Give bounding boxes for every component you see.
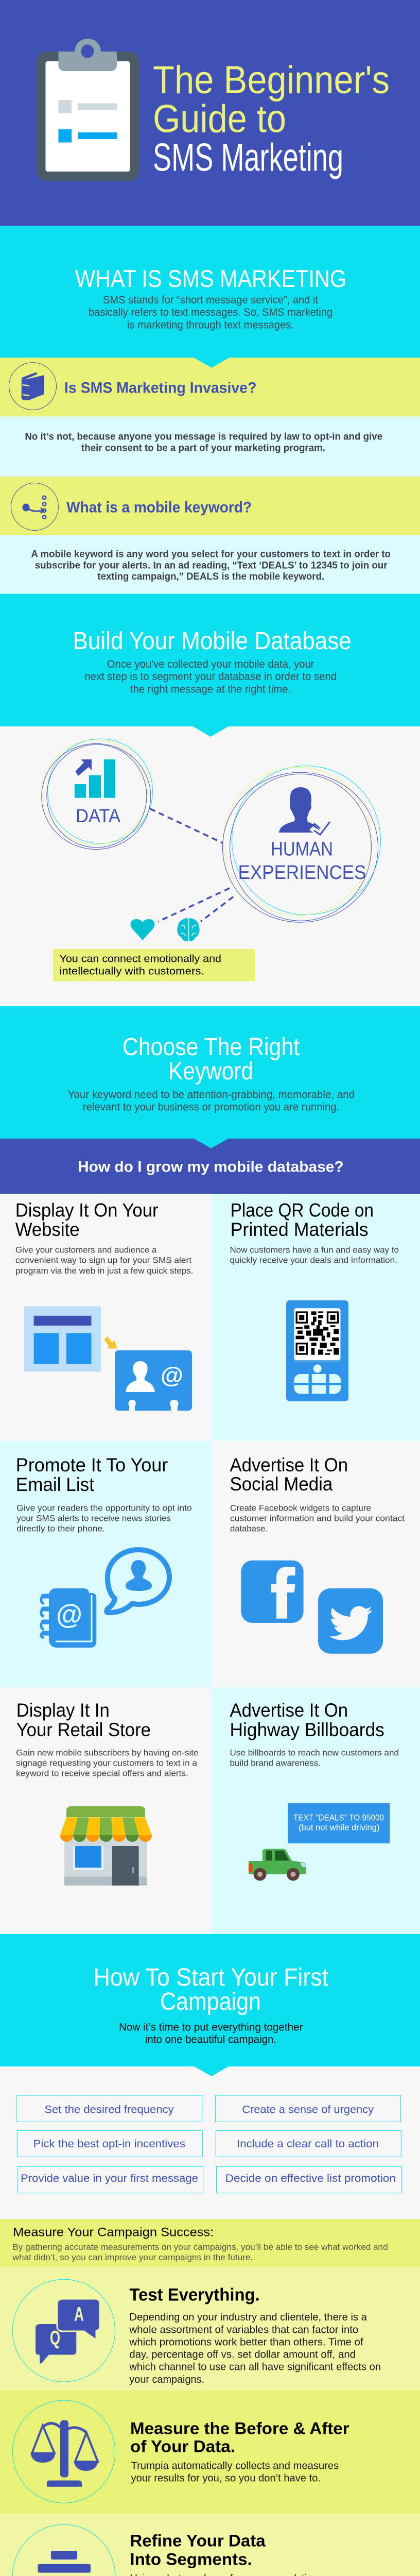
icon: clipboard: [36, 39, 139, 181]
step box: [215, 2095, 400, 2122]
icon: q and a bubbles: [12, 2279, 115, 2382]
heading: Into Segments.: [130, 2550, 252, 2568]
heading: Refine Your Data: [130, 2532, 266, 2550]
heading: Test Everything.: [129, 2285, 260, 2305]
step box: Create a sense of urgency: [242, 2104, 374, 2115]
heading: Campaign: [160, 1988, 261, 2015]
text block: the right message at the right time.: [130, 683, 291, 695]
step box: Decide on effective list promotion: [225, 2173, 396, 2184]
text block: [31, 548, 391, 582]
step box: Pick the best opt-in incentives: [33, 2138, 185, 2150]
text block: [230, 1503, 405, 1533]
text block: database.: [230, 1524, 268, 1533]
text block: Once you've collected your mobile data, your: [107, 658, 314, 670]
heading: Measure Your Campaign Success:: [13, 2225, 214, 2239]
panel: email list: [0, 1440, 211, 1687]
panel: how do i grow: [0, 1139, 420, 1194]
icon: data circle: [42, 739, 153, 850]
icon: storefront: [60, 1806, 152, 1886]
text block: By gathering accurate measurements on your campaigns, you’ll be able to see what worked and: [12, 2242, 388, 2252]
icon: twitter: [318, 1588, 383, 1654]
text block: subscribe for your alerts. In an ad reading, “Text ‘DEALS’ to 12345 to join our: [35, 560, 388, 571]
heading: [15, 1199, 159, 1240]
panel: hero: [0, 0, 420, 226]
panel: qr code: [211, 1194, 420, 1440]
text block: basically refers to text messages. So, SMS marketing: [89, 307, 332, 318]
text block: [16, 1503, 192, 1533]
step box: [17, 2130, 202, 2157]
text block: into one beautiful campaign.: [145, 2034, 276, 2045]
heading: How do I grow my mobile database?: [78, 1158, 344, 1176]
text block: your campaigns.: [129, 2374, 204, 2385]
panel: test everything: [0, 2267, 420, 2391]
text block: your SMS alerts to receive news stories: [16, 1514, 171, 1523]
icon: address book and speech bubble: @: [56, 1599, 82, 1630]
step box: Include a clear call to action: [237, 2138, 379, 2150]
heading: Advertise It On: [230, 1454, 348, 1476]
icon: brain: [177, 918, 200, 941]
panel: what is sms marketing: [0, 226, 420, 358]
text block: which promotions work better than others. Time of: [129, 2336, 363, 2348]
panel: data to human experiences diagram: [0, 726, 420, 1006]
heading: of Your Data.: [130, 2437, 235, 2455]
icon: heart: [131, 919, 154, 940]
icon: human experiences circle: [222, 766, 381, 922]
panel: refine your data: [0, 2514, 420, 2576]
text block: directly to their phone.: [16, 1524, 105, 1533]
text block: A mobile keyword is any word you select for your customers to text in order to: [31, 548, 391, 560]
heading: Build Your Mobile Database: [73, 628, 352, 655]
icon: scales: [12, 2400, 115, 2503]
panel: what is a mobile keyword: [0, 477, 420, 535]
icon: address book and speech bubble: [41, 1550, 169, 1648]
text block: Give your customers and audience a: [15, 1245, 157, 1255]
heading: [230, 1454, 348, 1495]
step box: [18, 2166, 203, 2193]
icon: q and a bubbles: A: [74, 2303, 84, 2326]
heading: What is a mobile keyword?: [66, 499, 252, 516]
text block: next step is to segment your database in order to send: [84, 671, 337, 683]
text block: [16, 1748, 199, 1778]
panel: display on website: [0, 1194, 211, 1440]
panel: keyword answer: [0, 535, 420, 594]
text block: SMS stands for “short message service”, and it: [103, 294, 318, 306]
text block: [12, 2242, 388, 2262]
panel: invasive answer: [0, 416, 420, 477]
text block: [89, 294, 332, 331]
text block: Use billboards to reach new customers and: [230, 1748, 399, 1758]
text block: which channel to use can all have significant effects on: [129, 2361, 381, 2373]
text block: [25, 431, 382, 453]
heading: Choose The Right: [122, 1033, 300, 1061]
heading: [94, 1964, 328, 2015]
heading: Measure the Before & After: [130, 2419, 349, 2437]
panel: retail store: [0, 1687, 211, 1934]
heading: Display It In: [16, 1700, 110, 1721]
title: SMS Marketing: [153, 135, 343, 179]
text block: keyword to receive special offers and alerts.: [16, 1769, 188, 1778]
text block: relevant to your business or promotion you are running.: [83, 1101, 339, 1113]
panel: choose the right keyword: [0, 1006, 420, 1139]
text block: Trumpia automatically collects and measures: [131, 2460, 339, 2471]
icon: keyword: [11, 483, 58, 531]
text block: your results for you, so you don’t have to.: [131, 2472, 321, 2484]
heading: [230, 1700, 384, 1740]
text block: day, percentage off vs. set dollar amount off, and: [129, 2349, 356, 2361]
text block: whole assortment of variables that can factor into: [129, 2324, 358, 2335]
callout: intellectually with customers.: [60, 965, 204, 977]
text block: [230, 1245, 399, 1265]
heading: Website: [15, 1219, 80, 1240]
text block: build brand awareness.: [230, 1758, 321, 1768]
text block: Give your readers the opportunity to opt into: [16, 1503, 192, 1513]
step box: [216, 2130, 401, 2157]
text block: Gain new mobile subscribers by having on-site: [16, 1748, 199, 1758]
panel: measure your campaign success: [0, 2219, 420, 2267]
icon: facebook: [241, 1561, 304, 1623]
panel: build your mobile database: [0, 594, 420, 726]
heading: [122, 1033, 300, 1085]
text block: convenient way to sign up for your SMS alert: [15, 1256, 191, 1265]
heading: [231, 1199, 374, 1240]
panel: how to start your first campaign: [0, 1934, 420, 2066]
icon: human experiences circle: EXPERIENCES: [238, 862, 366, 884]
heading: [16, 1700, 151, 1740]
heading: Keyword: [168, 1058, 253, 1085]
text block: is marketing through text messages.: [127, 319, 294, 331]
panel: is sms marketing invasive: [0, 358, 420, 416]
heading: Email List: [16, 1474, 95, 1495]
text block: Depending on your industry and clientele, there is a: [129, 2311, 367, 2323]
icon: human experiences circle: HUMAN: [271, 838, 333, 860]
heading: Highway Billboards: [230, 1719, 384, 1740]
icon: book: [9, 363, 57, 410]
text block: quickly receive your deals and information.: [230, 1256, 397, 1265]
text block: No it’s not, because anyone you message is required by law to opt-in and give: [25, 431, 382, 442]
panel: measure before and after: [0, 2391, 420, 2514]
icon: web page to contact card: [24, 1307, 192, 1411]
step box: [16, 2095, 202, 2122]
heading: Display It On Your: [15, 1199, 159, 1221]
heading: [130, 2419, 349, 2455]
text block: what didn’t, so you can improve your campaigns in the future.: [12, 2252, 253, 2262]
text block: [230, 1748, 399, 1768]
step box: Provide value in your first message: [21, 2173, 198, 2184]
text block: [131, 2460, 339, 2484]
heading: [130, 2532, 266, 2568]
heading: WHAT IS SMS MARKETING: [75, 265, 346, 292]
text block: [129, 2311, 381, 2385]
panel: highway billboards: [211, 1687, 420, 1934]
step box: [216, 2166, 402, 2193]
heading: Promote It To Your: [16, 1454, 168, 1476]
heading: Is SMS Marketing Invasive?: [64, 380, 256, 397]
icon: q and a bubbles: Q: [50, 2327, 60, 2349]
heading: Your Retail Store: [16, 1719, 151, 1740]
heading: How To Start Your First: [94, 1964, 328, 1991]
text block: texting campaign,” DEALS is the mobile keyword.: [97, 571, 324, 582]
panel: social media: [211, 1440, 420, 1687]
heading: Printed Materials: [231, 1219, 369, 1240]
heading: Advertise It On: [230, 1700, 348, 1721]
icon: segment bars: [12, 2524, 115, 2576]
title: The Beginner's: [153, 58, 390, 102]
icon: car: [249, 1849, 306, 1880]
text block: Create Facebook widgets to capture: [230, 1503, 371, 1513]
icon: phone with qr code: [286, 1300, 348, 1401]
panel: campaign steps: [0, 2066, 420, 2219]
callout: You can connect emotionally and: [60, 953, 221, 964]
text block: program via the web in just a few quick steps.: [15, 1266, 194, 1276]
heading: [16, 1454, 168, 1495]
heading: Social Media: [230, 1473, 333, 1495]
text block: [68, 1089, 355, 1113]
icon: data circle: DATA: [76, 805, 120, 826]
text block: [15, 1245, 194, 1276]
text block: customer information and build your contact: [230, 1514, 405, 1523]
icon: billboard sign: (but not while driving): [299, 1823, 379, 1833]
title: Guide to: [153, 97, 286, 141]
icon: billboard sign: [288, 1803, 390, 1843]
step box: Set the desired frequency: [44, 2104, 174, 2115]
icon: web page to contact card: @: [161, 1363, 183, 1388]
text block: [119, 2021, 303, 2045]
text block: Now customers have a fun and easy way to: [230, 1245, 399, 1255]
text block: signage requesting your customers to text in a: [16, 1758, 198, 1768]
text block: their consent to be a part of your marketing program.: [81, 442, 325, 453]
callout: [53, 949, 255, 981]
arrow: dashed connectors: [150, 809, 233, 922]
heading: Place QR Code on: [231, 1199, 374, 1221]
title: [153, 58, 390, 179]
text block: Your keyword need to be attention-grabbing, memorable, and: [68, 1089, 355, 1100]
text block: [84, 658, 337, 695]
icon: billboard sign: TEXT "DEALS" TO 95000: [293, 1812, 384, 1823]
text block: Now it’s time to put everything together: [119, 2021, 303, 2033]
